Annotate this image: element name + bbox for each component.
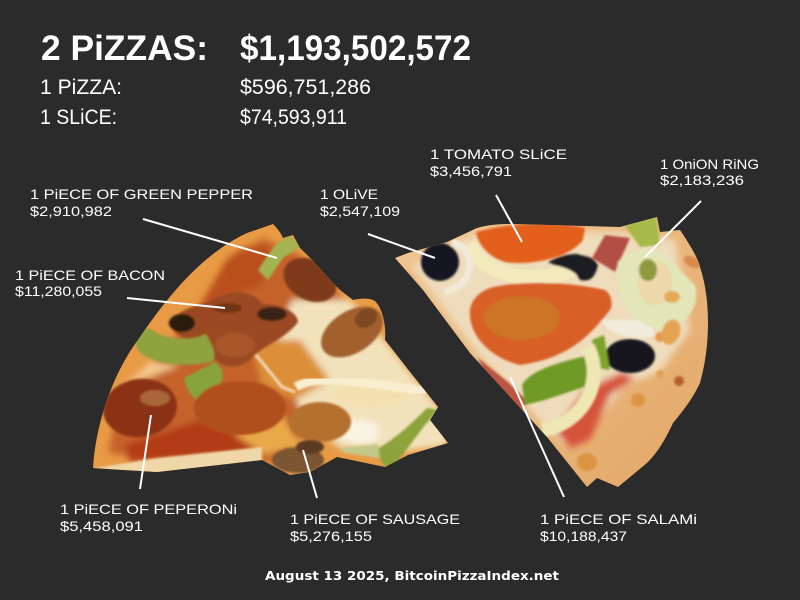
onion ring bbox=[617, 250, 696, 330]
label: tomato slice: $3,456,791 bbox=[430, 163, 512, 179]
label: tomato slice: 1 TOMATO SLiCE bbox=[430, 146, 567, 162]
label: olive: 1 OLiVE bbox=[320, 186, 378, 202]
onion arc under tomato bbox=[468, 245, 588, 278]
label: salami bbox=[540, 511, 697, 544]
label: bacon bbox=[15, 267, 165, 299]
footer: date and source: August 13 2025, BitcoinPizzaIndex.net bbox=[265, 569, 559, 583]
olives bbox=[421, 243, 459, 281]
label: olive: $2,547,109 bbox=[320, 203, 400, 219]
left pizza slice bbox=[85, 215, 455, 480]
label: salami: 1 PiECE OF SALAMi bbox=[540, 511, 697, 527]
bottom sausage bbox=[289, 402, 351, 442]
label: green pepper bbox=[30, 186, 253, 219]
price per pizza: 1 PiZZA: bbox=[40, 76, 122, 99]
right pizza slice bbox=[390, 210, 715, 495]
label: onion ring: 1 OniON RiNG bbox=[660, 156, 759, 172]
sausage pieces bbox=[282, 256, 338, 304]
green pepper top bbox=[625, 217, 660, 247]
price per slice bbox=[40, 106, 347, 129]
green pepper bbox=[522, 355, 590, 405]
pepper pieces bbox=[136, 328, 214, 365]
onion arc bbox=[542, 347, 594, 430]
melted pepperoni bbox=[194, 381, 286, 435]
price per pizza: $596,751,286 bbox=[240, 76, 371, 99]
tomato slice bbox=[476, 224, 585, 263]
label: onion ring bbox=[660, 156, 759, 188]
pepperoni bbox=[102, 377, 178, 438]
leader line: bacon bbox=[127, 298, 225, 308]
label: pepperoni bbox=[60, 501, 237, 534]
label: green pepper: 1 PiECE OF GREEN PEPPER bbox=[30, 186, 253, 202]
leader line: pepperoni bbox=[140, 415, 151, 489]
label: bacon: 1 PiECE OF BACON bbox=[15, 267, 165, 283]
label: pepperoni: 1 PiECE OF PEPERONi bbox=[60, 501, 237, 517]
price per pizza bbox=[40, 76, 371, 99]
leader line: salami bbox=[510, 377, 564, 497]
crust spots bbox=[655, 332, 665, 342]
label: green pepper: $2,910,982 bbox=[30, 203, 112, 219]
label: sausage: $5,276,155 bbox=[290, 528, 372, 544]
leader line: tomato bbox=[496, 195, 522, 242]
price per slice: 1 SLiCE: bbox=[40, 106, 117, 129]
label: tomato slice bbox=[430, 146, 567, 179]
bacon bbox=[168, 292, 298, 367]
label: sausage bbox=[290, 511, 460, 544]
heading: total price: $1,193,502,572 bbox=[240, 29, 471, 68]
label: bacon: $11,280,055 bbox=[15, 283, 102, 299]
heading: total price: 2 PiZZAS: bbox=[41, 29, 208, 68]
label: onion ring: $2,183,236 bbox=[660, 172, 744, 188]
label: sausage: 1 PiECE OF SAUSAGE bbox=[290, 511, 460, 527]
leader line: olive bbox=[368, 234, 435, 258]
price per slice: $74,593,911 bbox=[240, 106, 347, 129]
leader line: sausage bbox=[303, 450, 317, 498]
heading: total price bbox=[41, 29, 471, 68]
salami bbox=[470, 283, 612, 365]
leader line: green pepper bbox=[143, 219, 277, 258]
label: olive bbox=[320, 186, 400, 219]
label: pepperoni: $5,458,091 bbox=[60, 518, 143, 534]
label: salami: $10,188,437 bbox=[540, 528, 627, 544]
leader line: onion bbox=[645, 201, 701, 257]
